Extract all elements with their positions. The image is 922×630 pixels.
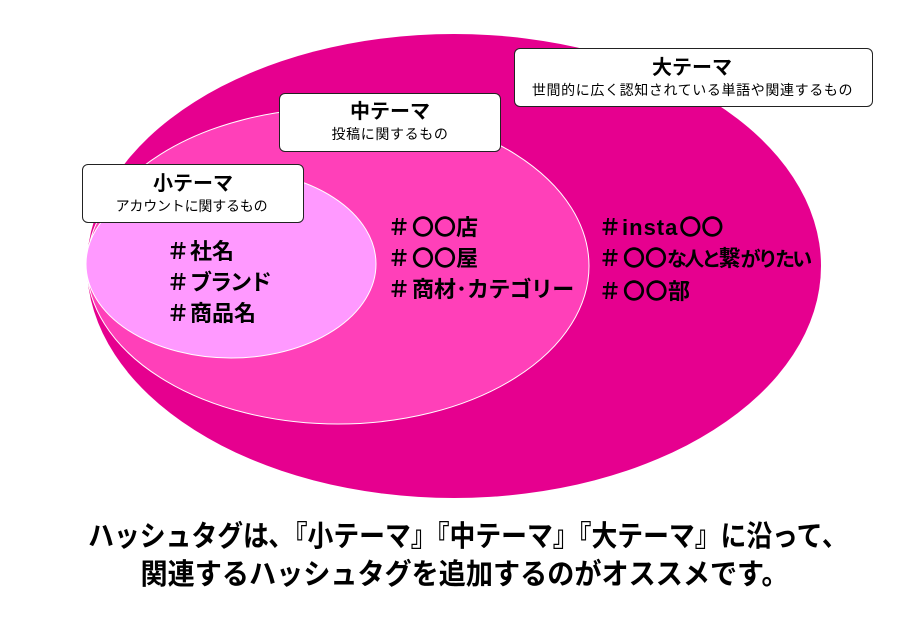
label: medium theme: 投稿に関するもの — [332, 126, 448, 142]
label: small theme: アカウントに関するもの — [116, 198, 267, 214]
label: small theme: 小テーマ — [153, 173, 233, 195]
hashtags: medium theme: ＃〇〇店 — [388, 215, 478, 240]
hashtags: small theme — [167, 239, 270, 326]
small theme ellipse — [86, 170, 376, 358]
label: medium theme: 中テーマ — [350, 101, 430, 123]
label: large theme — [514, 48, 873, 107]
hashtags: medium theme: ＃〇〇屋 — [388, 246, 478, 271]
label: small theme — [82, 164, 304, 223]
medium theme ellipse — [87, 108, 589, 424]
hashtags: large theme: ＃insta〇〇 — [599, 215, 723, 240]
hashtags: medium theme — [388, 215, 574, 302]
label: large theme: 大テーマ — [652, 57, 732, 79]
hashtags: medium theme: ＃商材･カテゴリー — [388, 277, 574, 302]
bottom message: 関連するハッシュタグを追加するのがオススメです。 — [141, 559, 789, 591]
hashtags: small theme: ＃社名 — [167, 239, 234, 264]
bottom message: ハッシュタグは､『小テーマ』『中テーマ』『大テーマ』に沿って､ — [88, 521, 836, 553]
hashtags: small theme: ＃ブランド — [167, 270, 270, 295]
large theme ellipse — [87, 34, 821, 498]
hashtags: large theme: ＃〇〇部 — [599, 279, 691, 304]
label: medium theme — [279, 93, 501, 152]
hashtags: large theme: ＃〇〇な人と繋がりたい — [599, 246, 809, 271]
hashtags: large theme — [599, 215, 812, 304]
label: large theme: 世間的に広く認知されている単語や関連するもの — [532, 82, 853, 98]
hashtags: small theme: ＃商品名 — [167, 301, 256, 326]
bottom message — [88, 520, 836, 591]
